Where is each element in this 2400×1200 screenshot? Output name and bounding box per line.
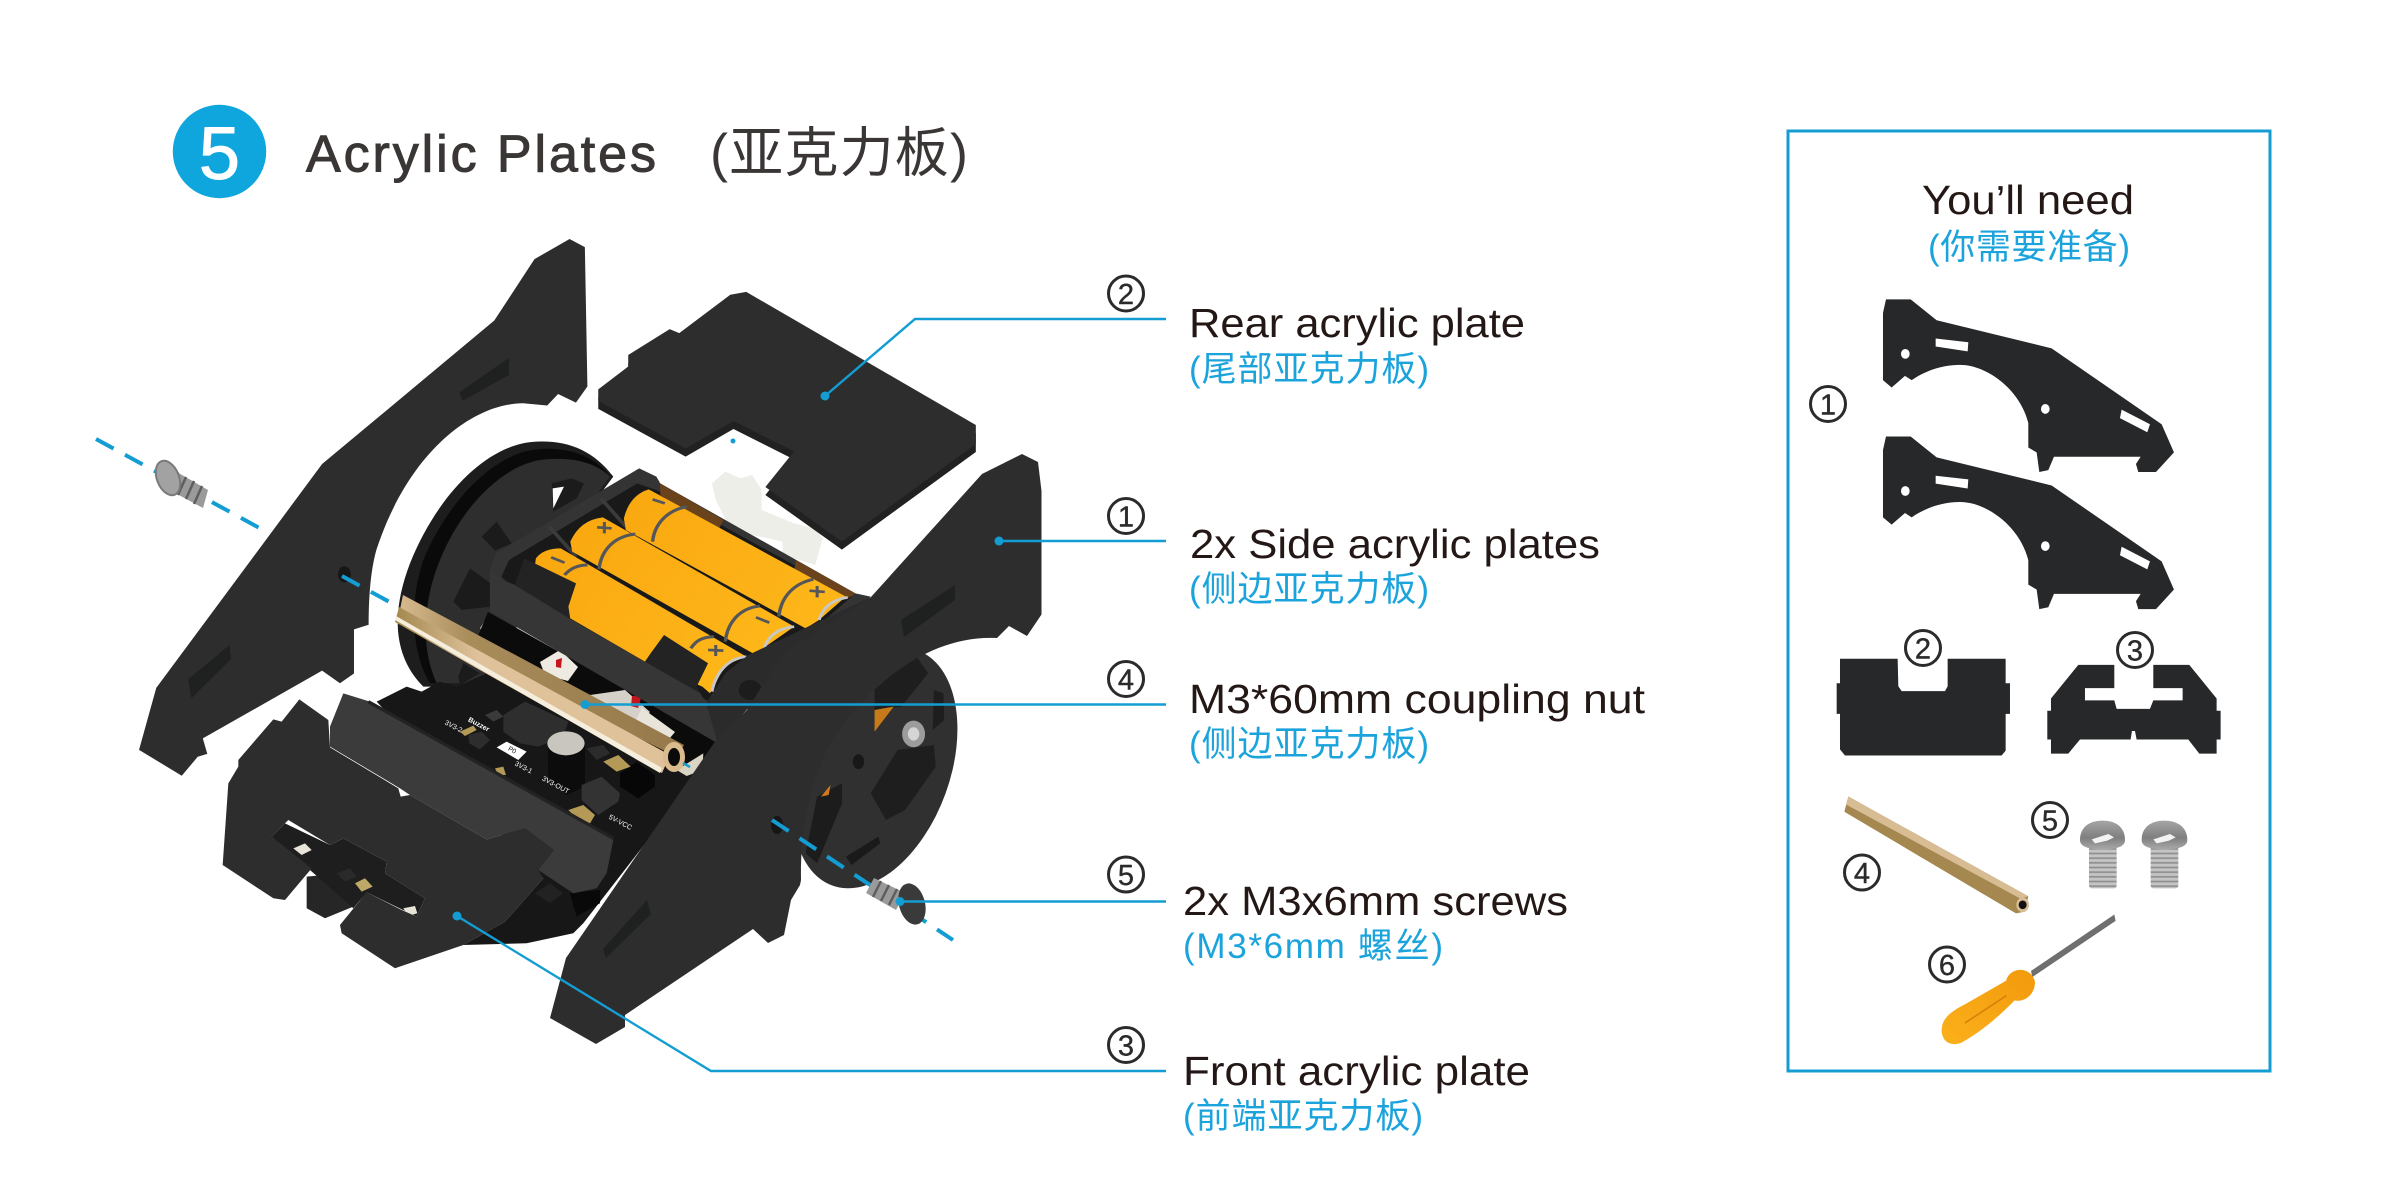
side acrylic plate right <box>550 454 1042 1044</box>
part numbers: 6 <box>1939 950 1955 982</box>
right wheel <box>762 625 988 911</box>
wiring connectors under holder <box>470 612 735 790</box>
callout 3: front acrylic plate <box>452 912 1530 1136</box>
side acrylic plate left <box>139 239 587 776</box>
screw left <box>151 457 208 508</box>
circuit board with front box: 3V3-OUT <box>541 776 571 796</box>
callout 5: screws: (M3*6mm 螺丝) <box>1183 927 1443 966</box>
title: Acrylic Plates <box>306 124 968 184</box>
callout 2: rear acrylic plate: Rear acrylic plate <box>1189 300 1525 346</box>
illustration: exploded robot assembly <box>96 239 1042 1044</box>
battery front <box>515 548 746 693</box>
callout 2: rear acrylic plate: (尾部亚克力板) <box>1189 350 1429 389</box>
part: rear plate <box>1837 659 2010 755</box>
panel heading <box>1922 177 2134 267</box>
circuit board with front box: 3V3-2 <box>443 720 463 735</box>
callout 3: front acrylic plate: (前端亚克力板) <box>1183 1097 1423 1136</box>
nut: M3 coupling nut <box>395 595 690 773</box>
circuit board with front box: P0 <box>507 746 517 756</box>
screw right <box>866 878 930 928</box>
circuit board with front box: 5V-VCC <box>607 814 633 832</box>
title badge: step 5 <box>173 105 266 198</box>
callout 1: side acrylic plates: 1 <box>1118 502 1134 534</box>
dashed assembly axes <box>96 439 953 940</box>
part numbers: 1 <box>1820 390 1836 422</box>
title badge: step 5: 5 <box>199 112 240 195</box>
panel heading: (你需要准备) <box>1928 228 2130 267</box>
callout 5: screws: 5 <box>1118 860 1134 892</box>
callout 1: side acrylic plates: (侧边亚克力板) <box>1189 570 1429 609</box>
title: Acrylic Plates: Acrylic Plates <box>306 126 656 184</box>
part: screwdriver <box>1942 918 2115 1044</box>
callout 3: front acrylic plate: 3 <box>1118 1030 1134 1062</box>
part numbers: 3 <box>2127 636 2143 668</box>
panel heading: You’ll need <box>1922 177 2134 223</box>
rear acrylic plate <box>598 292 976 550</box>
callout 4: coupling nut: (侧边亚克力板) <box>1189 725 1429 764</box>
part: front plate <box>2047 665 2221 754</box>
part numbers <box>1810 386 2152 982</box>
callout 1: side acrylic plates: 2x Side acrylic plates <box>1190 521 1600 567</box>
holder front wall <box>490 570 746 743</box>
circuit board with front box: 3V3-1 <box>513 761 533 776</box>
callout 2: rear acrylic plate <box>820 276 1525 400</box>
part: coupling nut <box>1844 796 2029 913</box>
circuit board with front box: Buzzer <box>467 717 490 734</box>
title: Acrylic Plates: (亚克力板) <box>710 124 968 184</box>
battery holder <box>490 468 871 743</box>
callout 1: side acrylic plates <box>994 498 1600 609</box>
panel: you'll need <box>1788 131 2270 1071</box>
callout 5: screws <box>896 857 1568 966</box>
part: two screws <box>2080 821 2187 888</box>
callout 4: coupling nut: M3*60mm coupling nut <box>1189 676 1646 722</box>
callout 4: coupling nut: 4 <box>1118 664 1134 696</box>
callout 5: screws: 2x M3x6mm screws <box>1183 878 1568 924</box>
part numbers: 5 <box>2042 806 2058 838</box>
battery middle <box>570 517 794 655</box>
part numbers: 2 <box>1915 634 1931 666</box>
circuit board with front box <box>330 665 710 945</box>
white wire clip <box>712 472 823 565</box>
callout 2: rear acrylic plate: 2 <box>1118 279 1134 311</box>
front acrylic plate <box>223 699 554 968</box>
callout 3: front acrylic plate: Front acrylic plate <box>1183 1048 1530 1094</box>
left wheel <box>398 441 613 687</box>
battery back <box>624 489 848 628</box>
parts: two side plates <box>1883 299 2174 609</box>
part numbers: 4 <box>1854 858 1870 890</box>
callout 4: coupling nut <box>580 662 1646 764</box>
